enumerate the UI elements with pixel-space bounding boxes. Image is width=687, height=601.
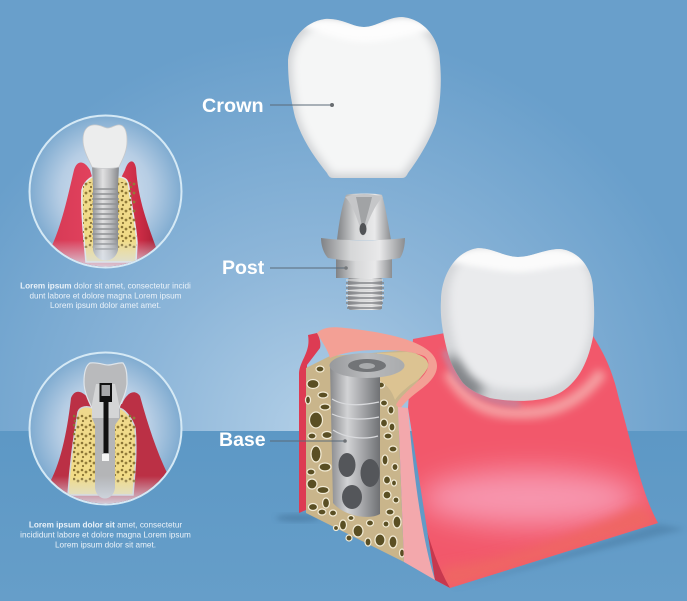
large tooth xyxy=(440,248,594,401)
inset text 1: dunt labore et dolore magna Lorem ipsum xyxy=(29,291,182,300)
inset circle: implant cross-section xyxy=(30,352,182,506)
gum model xyxy=(299,325,665,595)
crown section xyxy=(84,363,127,408)
gum xyxy=(50,392,168,505)
small crown xyxy=(83,125,127,168)
floor shadows xyxy=(276,514,685,589)
fade at base xyxy=(52,242,159,266)
tan upper bone xyxy=(377,352,428,400)
inset text 1: Lorem ipsum dolor amet amet. xyxy=(50,301,161,310)
label: Base: Base xyxy=(219,429,266,451)
inset circle: implant with crown xyxy=(30,116,182,275)
post flange xyxy=(321,238,405,261)
post abutment xyxy=(321,194,405,310)
label: Crown xyxy=(202,95,334,117)
abutment xyxy=(92,384,119,418)
inset text 2: incididunt labore et dolore magna Lorem ipsum xyxy=(20,530,191,540)
pink gum flap xyxy=(317,327,437,409)
implant body xyxy=(92,405,120,498)
bone section xyxy=(306,350,430,562)
fade at base xyxy=(51,478,162,504)
gum outer xyxy=(408,333,658,588)
post top xyxy=(337,194,391,240)
post collar xyxy=(336,255,392,278)
inset text 2: Lorem ipsum dolor sit amet, consectetur xyxy=(29,521,182,530)
label: Crown: Crown xyxy=(202,95,264,117)
crown xyxy=(288,17,441,178)
label: Post xyxy=(222,257,348,279)
left gum strip xyxy=(299,333,320,513)
spongy bone pores xyxy=(306,366,404,557)
bone xyxy=(68,407,136,495)
bone xyxy=(82,177,137,262)
pink edge strip xyxy=(398,407,435,580)
label: Post: Post xyxy=(222,257,265,279)
implant cylinder xyxy=(330,353,404,517)
inset text 2: Lorem ipsum dolor sit amet. xyxy=(55,540,156,549)
implant screw xyxy=(92,166,119,260)
label: Base xyxy=(219,429,347,451)
gum xyxy=(52,161,156,266)
inset text 1: Lorem ipsum dolor sit amet, consectetur incidi xyxy=(20,282,191,291)
post thread xyxy=(346,277,384,310)
screw xyxy=(100,383,112,402)
